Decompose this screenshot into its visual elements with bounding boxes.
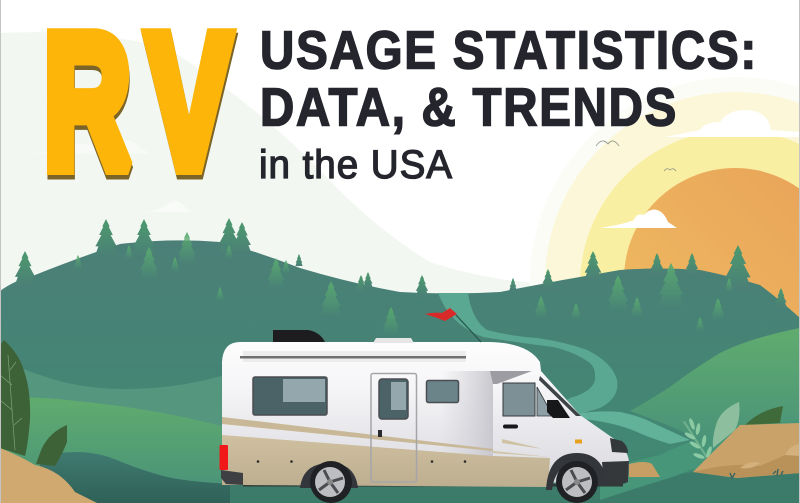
letter V shadow: V: [148, 0, 232, 213]
left leaf large: [0, 340, 30, 456]
cloud: by sun: [600, 210, 677, 228]
trees on hill: [74, 232, 733, 335]
tan lower panel: [222, 435, 550, 487]
fern: [683, 418, 713, 460]
grass tufts: [730, 469, 783, 478]
cab window: [503, 383, 535, 416]
left teal hill: [0, 360, 225, 440]
body shell: [222, 342, 629, 485]
cloud: pale small: [145, 201, 192, 212]
mirror: [547, 400, 570, 418]
small rock: [629, 462, 660, 477]
sun with rings: [530, 77, 800, 487]
rear wheel: [300, 461, 358, 503]
rear bumper: [221, 470, 243, 485]
trees on skyline: [14, 218, 787, 308]
right green bump: [600, 420, 800, 500]
letter R shadow: R: [44, 0, 131, 212]
left rock: [0, 448, 97, 503]
cab stripes: [493, 439, 550, 457]
headlight: [610, 438, 628, 453]
right green hill: [630, 328, 800, 440]
tail light: [220, 445, 228, 470]
cab door handle: [503, 424, 518, 428]
windshield edge: [539, 376, 581, 416]
side marker: [575, 440, 582, 444]
awning: [240, 351, 466, 362]
letter R: R: [44, 0, 131, 208]
flag pole: [456, 315, 481, 342]
river lower: [575, 411, 690, 444]
side shading near cab: [440, 371, 493, 457]
birds: [596, 141, 676, 171]
foreground ground center: [230, 460, 800, 503]
river upper: [438, 293, 617, 420]
subtitle: in the USA: [259, 143, 453, 187]
back hill: [0, 240, 800, 503]
AC unit: [273, 330, 325, 342]
cab quarter window: [537, 387, 553, 416]
foreground dark hill left: [40, 452, 240, 503]
skylight: [373, 338, 414, 343]
front wheel: [546, 453, 607, 503]
title line 2: DATA, & TRENDS: [260, 78, 678, 138]
side window: [426, 380, 458, 402]
letter V: V: [147, 0, 231, 208]
cloud: top right: [665, 110, 800, 137]
roof overhang shade: [490, 371, 532, 384]
rear window: [253, 377, 327, 415]
door: [371, 374, 416, 482]
RV vehicle: [220, 308, 629, 503]
cloud: pale left: [30, 140, 150, 154]
side rivets: [257, 460, 466, 463]
pale hillside in sky: [0, 32, 580, 300]
front bumper: [602, 461, 629, 485]
right pale leaf: [713, 402, 740, 448]
tan stripe: [222, 417, 493, 451]
red flag: [425, 308, 457, 321]
right dark leaf: [745, 406, 783, 425]
underside: [243, 484, 623, 486]
right rock: [693, 423, 800, 478]
title: RV: [44, 0, 232, 213]
left bright hill: [0, 396, 225, 490]
left leaf small: [36, 425, 67, 466]
bottom right ground: [597, 472, 800, 503]
